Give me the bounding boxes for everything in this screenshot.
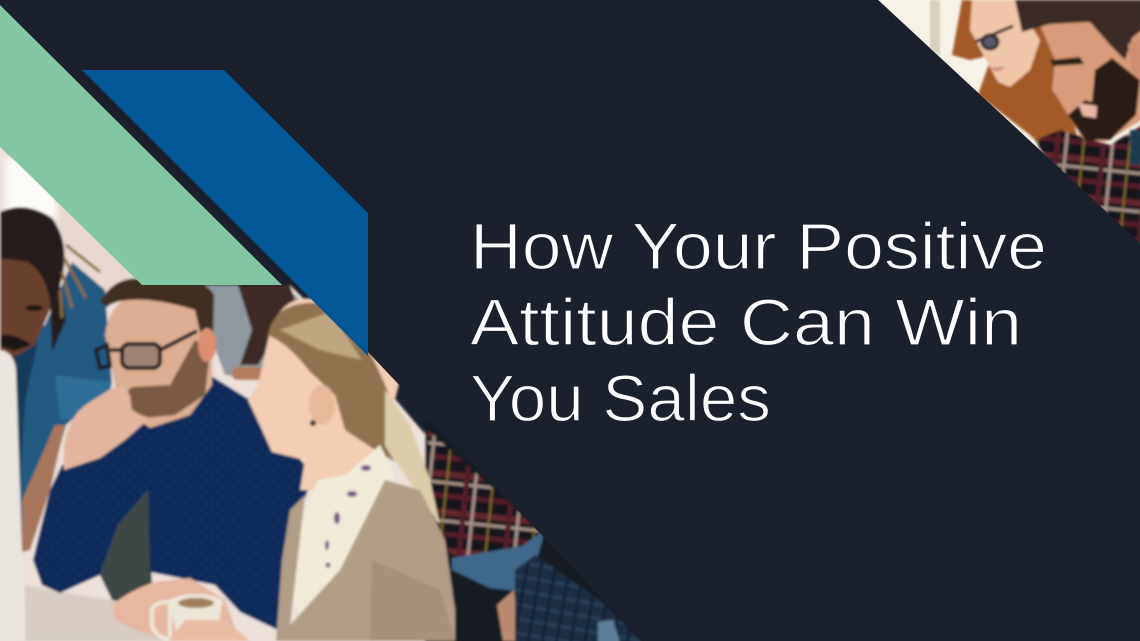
woman face: [970, 0, 1040, 87]
woman hair: [952, 0, 1080, 165]
plaid shirt person behind: [428, 430, 550, 560]
green diagonal band: [0, 5, 282, 285]
jeans: [452, 530, 545, 592]
hand: [64, 386, 150, 470]
hand behind: [497, 590, 520, 641]
blue diagonal band: [82, 70, 368, 356]
dark plaid figure: [515, 555, 660, 641]
title line 1: How Your Positive: [470, 209, 1047, 283]
head: [105, 290, 212, 428]
title line 3: You Sales: [470, 361, 771, 435]
dark gap beside arm: [100, 490, 152, 604]
man with glasses: shirt: [33, 278, 308, 630]
glasses: [96, 331, 197, 368]
man face: [1040, 18, 1140, 142]
plaid shirt: [1035, 125, 1140, 255]
dark fill behind plaid person: [425, 420, 680, 641]
woman with blond hair: [248, 298, 455, 641]
man with dreadlocks: [0, 207, 112, 560]
man hair: [1015, 0, 1140, 60]
window: [6, 158, 56, 218]
grey person behind: [205, 285, 300, 380]
hands and cup: [112, 578, 250, 641]
photo: team at desk, lower left: [0, 140, 680, 641]
monitor: [0, 350, 25, 641]
office background: [0, 140, 430, 641]
table: [25, 585, 175, 641]
title: [470, 209, 1047, 435]
title line 2: Attitude Can Win: [470, 285, 1022, 359]
photo: two colleagues, upper right: [876, 0, 1140, 255]
wall behind: [60, 195, 150, 300]
beard: [1068, 58, 1140, 140]
